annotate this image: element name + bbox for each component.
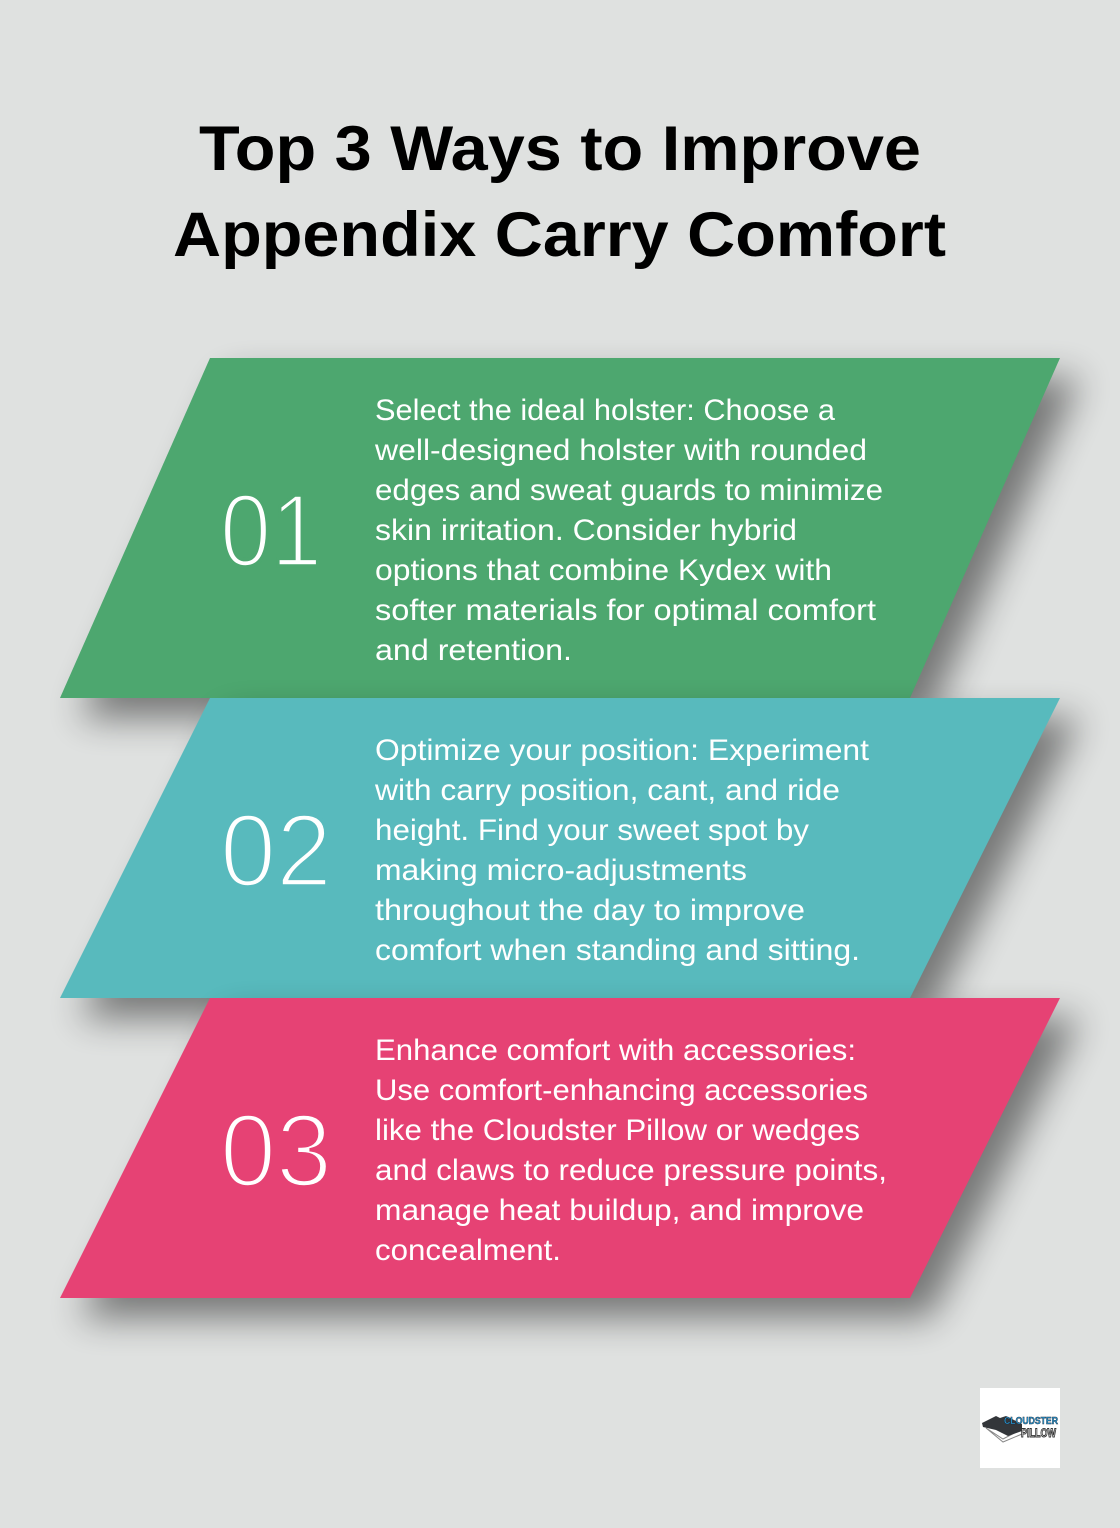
text: step 01 description <box>374 394 883 667</box>
text: step 01 description: and retention. <box>375 634 572 667</box>
text: step 02 description: height. Find your sweet spot by <box>375 814 809 847</box>
text: step 01 description: Select the ideal holster: Choose a <box>375 394 835 427</box>
title <box>173 114 946 270</box>
logo wordmark: PILLOW <box>1021 1426 1056 1440</box>
text: step 01 description: softer materials for optimal comfort <box>375 594 877 627</box>
text: step 02 description: making micro-adjustments <box>375 854 747 887</box>
text: step 01 description: edges and sweat guards to minimize <box>375 474 883 507</box>
text: step 02 description: throughout the day to improve <box>375 894 805 927</box>
logo wordmark <box>1004 1416 1059 1440</box>
text: step 02 description <box>374 734 870 967</box>
logo wordmark: CLOUDSTER <box>1004 1416 1059 1427</box>
title: Appendix Carry Comfort <box>173 200 946 270</box>
logo: Cloudster Pillow <box>980 1388 1060 1468</box>
panel: step 02 <box>60 698 1080 1018</box>
number 03: 03 <box>220 1093 332 1208</box>
text: step 03 description: and claws to reduce pressure points, <box>375 1154 887 1187</box>
text: step 03 description: manage heat buildup, and improve <box>375 1194 864 1227</box>
panel: step 01 <box>60 358 1080 718</box>
text: step 01 description: options that combine Kydex with <box>375 554 832 587</box>
text: step 02 description: with carry position, cant, and ride <box>374 774 840 807</box>
title: Top 3 Ways to Improve <box>199 114 921 184</box>
text: step 03 description: Enhance comfort with accessories: <box>375 1034 856 1067</box>
text: step 03 description: like the Cloudster Pillow or wedges <box>375 1114 860 1147</box>
icon: pillow <box>982 1416 1022 1442</box>
text: step 01 description: well-designed holster with rounded <box>374 434 867 467</box>
number 01: 01 <box>220 473 322 588</box>
text: step 03 description: concealment. <box>375 1234 561 1267</box>
text: step 03 description: Use comfort-enhancing accessories <box>375 1074 868 1107</box>
text: step 02 description: comfort when standing and sitting. <box>375 934 860 967</box>
text: step 03 description <box>375 1034 887 1267</box>
text: step 01 description: skin irritation. Consider hybrid <box>375 514 797 547</box>
panel: step 03 <box>60 998 1080 1318</box>
number 02: 02 <box>220 793 332 908</box>
text: step 02 description: Optimize your position: Experiment <box>375 734 870 767</box>
